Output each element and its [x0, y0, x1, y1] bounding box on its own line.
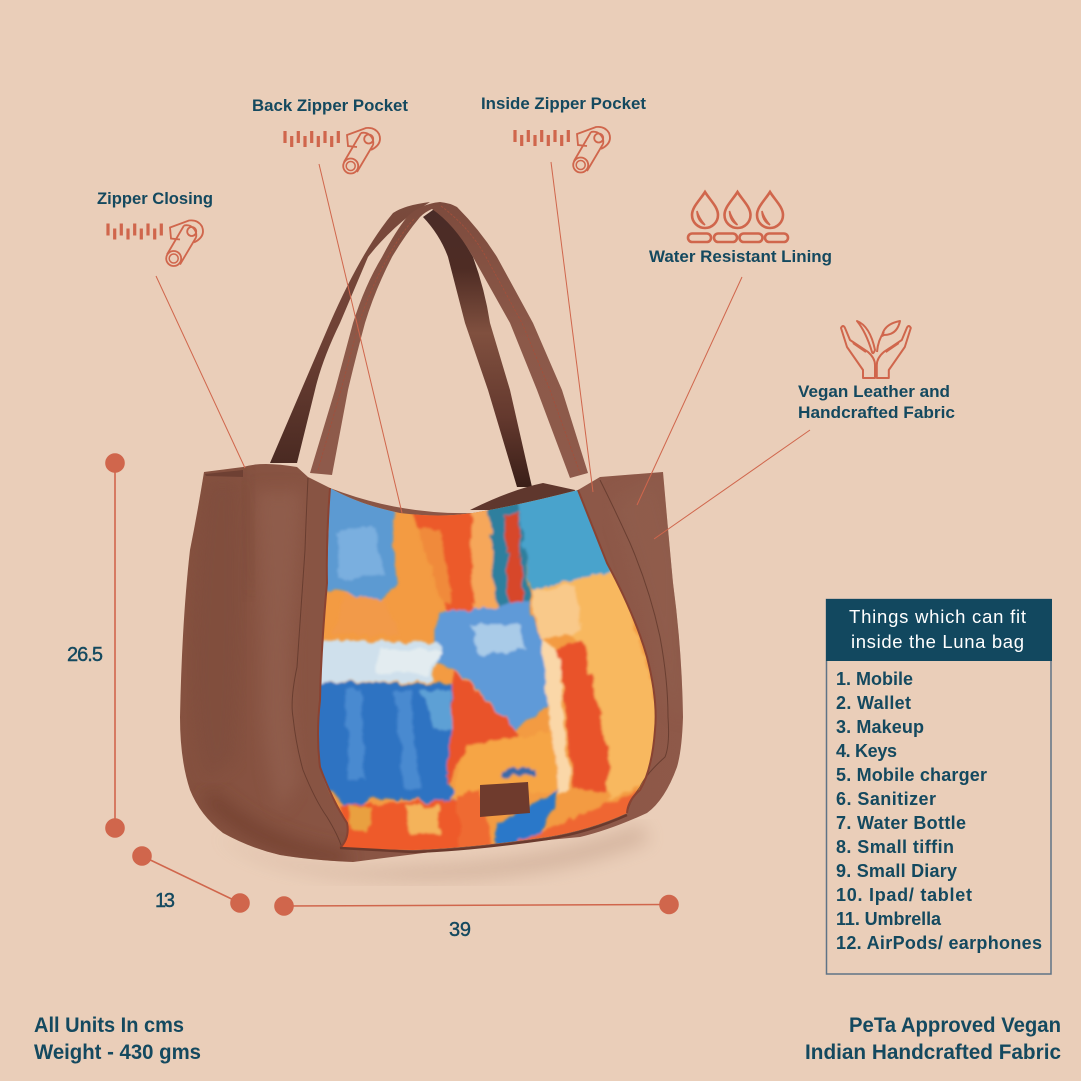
front panel seams [292, 478, 669, 852]
list: 7. Water Bottle [836, 813, 966, 833]
dimension: width [275, 896, 678, 915]
fabric panel [319, 488, 655, 850]
list: 2. Wallet [836, 693, 911, 713]
note: peta approved: PeTa Approved Vegan [849, 1014, 1061, 1037]
note: peta approved [805, 1014, 1061, 1064]
label: vegan leather: Vegan Leather and [798, 382, 950, 401]
panel header: inside the Luna bag [851, 631, 1024, 652]
list: 12. AirPods/ earphones [836, 933, 1042, 953]
bag lining [470, 483, 575, 510]
panel frame [826, 600, 1051, 974]
dimension: height [106, 454, 124, 837]
icon: back zipper [285, 128, 380, 174]
logo patch [480, 782, 530, 817]
icon: zipper closing [108, 220, 203, 266]
list: 9. Small Diary [836, 861, 957, 881]
shadow [215, 825, 650, 880]
list: 3. Makeup [836, 717, 924, 737]
list [836, 669, 1042, 953]
list: 10. Ipad/ tablet [836, 885, 972, 905]
value: width: 39 [449, 919, 471, 941]
list: 6. Sanitizer [836, 789, 936, 809]
panel: things which fit [826, 599, 1052, 974]
value: height: 26.5 [67, 644, 103, 666]
icon: water drops [688, 192, 788, 242]
list: 1. Mobile [836, 669, 913, 689]
handles [270, 202, 588, 487]
list: 4. Keys [836, 741, 897, 761]
label: zipper closing: Zipper Closing [97, 189, 213, 208]
icon: inside zipper [515, 127, 610, 172]
note: units and weight [34, 1014, 201, 1064]
note: units and weight: Weight - 430 gms [34, 1041, 201, 1064]
panel header: Things which can fit [849, 606, 1026, 627]
panel header [826, 599, 1052, 661]
note: units and weight: All Units In cms [34, 1014, 184, 1037]
note: peta approved: Indian Handcrafted Fabric [805, 1041, 1061, 1064]
label: vegan leather [798, 382, 955, 422]
bag photo [170, 202, 700, 880]
dimension: depth [133, 847, 249, 912]
label: back zipper pocket: Back Zipper Pocket [252, 96, 408, 115]
bag body [180, 464, 683, 862]
label: water resistant: Water Resistant Lining [649, 247, 832, 266]
icon: hands and leaves [841, 321, 911, 378]
leader lines [156, 162, 810, 539]
list: 5. Mobile charger [836, 765, 987, 785]
value: depth: 13 [155, 890, 175, 912]
gusset folds [200, 497, 201, 498]
list: 8. Small tiffin [836, 837, 954, 857]
label: vegan leather: Handcrafted Fabric [798, 403, 955, 422]
label: inside zipper pocket: Inside Zipper Pocket [481, 94, 646, 113]
list: 11. Umbrella [836, 909, 942, 929]
